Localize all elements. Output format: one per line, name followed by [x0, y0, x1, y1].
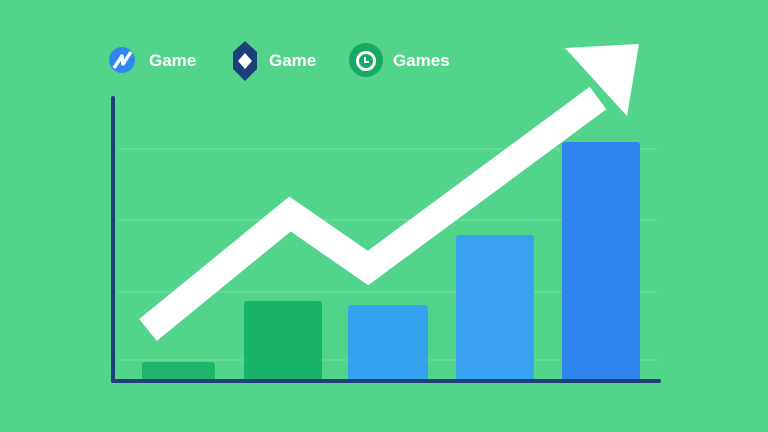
bar chart	[142, 142, 640, 381]
legend	[109, 41, 450, 81]
legend item 1	[109, 47, 196, 73]
legend item 2	[233, 41, 316, 81]
legend item 3	[349, 43, 450, 77]
legend item 3: Games	[393, 51, 450, 70]
legend item 2: Game	[269, 51, 316, 70]
axes	[113, 98, 659, 381]
arrow: growth trend	[148, 44, 639, 330]
legend item 1: Game	[149, 51, 196, 70]
